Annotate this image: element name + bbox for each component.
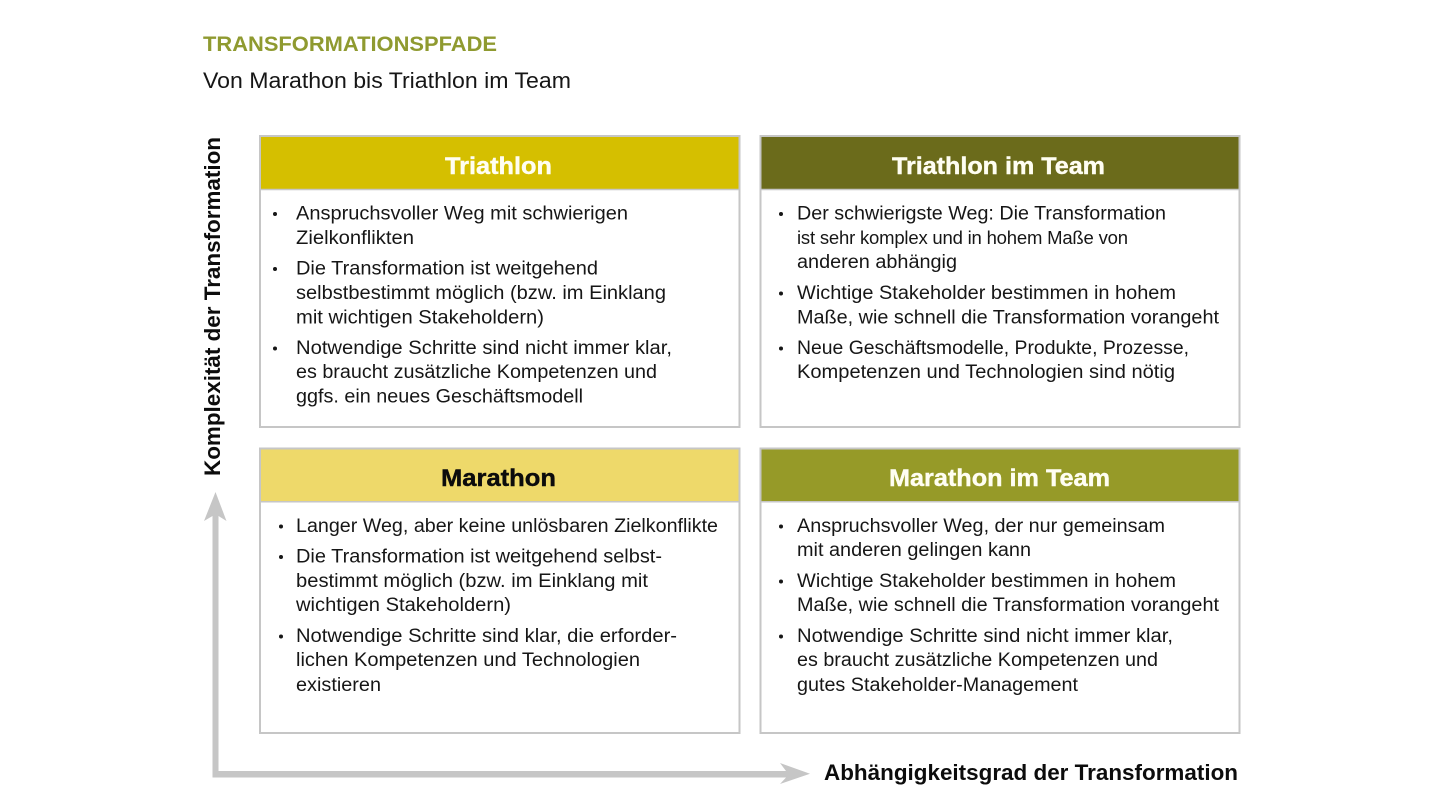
bullet list: Marathon im Team: Wichtige Stakeholder bestimmen in hohem — [797, 571, 1176, 592]
header: Marathon — [260, 450, 740, 502]
bullet list: Marathon im Team: es braucht zusätzliche Kompetenzen und — [797, 650, 1158, 671]
bullet list: Triathlon im Team: Maße, wie schnell die Transformation vorangeht — [797, 308, 1220, 328]
header: Marathon: Marathon — [441, 465, 556, 492]
y-axis label: Komplexität der Transformation — [200, 137, 225, 476]
bullet list: Marathon im Team — [779, 516, 1220, 696]
bullet list: Triathlon: selbstbestimmt möglich (bzw. im Einklang — [296, 283, 666, 304]
bullet list: Marathon: existieren — [296, 675, 381, 696]
bullet list: Triathlon: Die Transformation ist weitgehend — [296, 258, 598, 280]
panel: Marathon — [260, 448, 740, 733]
subtitle: Von Marathon bis Triathlon im Team — [203, 68, 571, 93]
bullet list: Marathon: Langer Weg, aber keine unlösbaren Zielkonflikte — [296, 516, 718, 537]
bullet list: Triathlon: es braucht zusätzliche Kompetenzen und — [296, 362, 657, 383]
panel: Marathon im Team — [760, 448, 1240, 733]
header: Triathlon im Team: Triathlon im Team — [892, 153, 1105, 180]
bullet list: Triathlon im Team — [779, 204, 1220, 383]
bullet list: Marathon: lichen Kompetenzen und Technologien — [296, 650, 640, 671]
bullet list: Triathlon im Team: Neue Geschäftsmodelle, Produkte, Prozesse, — [797, 338, 1189, 359]
bullet list: Triathlon im Team: Kompetenzen und Technologien sind nötig — [797, 362, 1175, 383]
bullet list: Marathon: wichtigen Stakeholdern) — [295, 595, 511, 616]
panel: Triathlon im Team — [760, 136, 1240, 427]
title: TRANSFORMATIONSPFADE — [203, 33, 497, 56]
bullet list: Triathlon: Anspruchsvoller Weg mit schwierigen — [296, 204, 628, 224]
bullet list: Triathlon — [273, 204, 672, 408]
bullet list: Triathlon im Team: Wichtige Stakeholder bestimmen in hohem — [797, 283, 1176, 304]
bullet list: Triathlon im Team: Der schwierigste Weg: Die Transformation — [797, 204, 1166, 224]
header: Triathlon: Triathlon — [445, 153, 552, 180]
bullet list: Marathon: bestimmt möglich (bzw. im Einklang mit — [296, 571, 649, 592]
bullet list: Marathon im Team: gutes Stakeholder-Management — [797, 675, 1079, 696]
bullet list: Marathon — [279, 516, 718, 696]
x-axis label: Abhängigkeitsgrad der Transformation — [824, 760, 1238, 785]
arrow: axes — [204, 492, 810, 784]
bullet list: Triathlon: Zielkonflikten — [296, 228, 414, 249]
bullet list: Marathon: Die Transformation ist weitgehend selbst- — [296, 546, 662, 568]
bullet list: Marathon: Notwendige Schritte sind klar, die erforder- — [296, 626, 677, 647]
bullet list: Marathon im Team: Anspruchsvoller Weg, der nur gemeinsam — [797, 516, 1165, 537]
panel: Triathlon — [260, 136, 740, 427]
header: Marathon im Team — [760, 450, 1240, 502]
header: Triathlon — [260, 137, 740, 190]
header: Marathon im Team: Marathon im Team — [889, 465, 1110, 492]
bullet list: Marathon im Team: mit anderen gelingen kann — [797, 540, 1031, 561]
bullet list: Marathon im Team: Notwendige Schritte sind nicht immer klar, — [797, 626, 1173, 647]
bullet list: Triathlon im Team: anderen abhängig — [797, 252, 957, 273]
bullet list: Triathlon im Team: ist sehr komplex und in hohem Maße von — [797, 227, 1128, 248]
bullet list: Marathon im Team: Maße, wie schnell die Transformation vorangeht — [797, 595, 1220, 616]
bullet list: Triathlon: mit wichtigen Stakeholdern) — [296, 308, 544, 328]
bullet list: Triathlon: Notwendige Schritte sind nicht immer klar, — [296, 338, 672, 359]
header: Triathlon im Team — [760, 137, 1240, 190]
bullet list: Triathlon: ggfs. ein neues Geschäftsmodell — [296, 386, 583, 408]
